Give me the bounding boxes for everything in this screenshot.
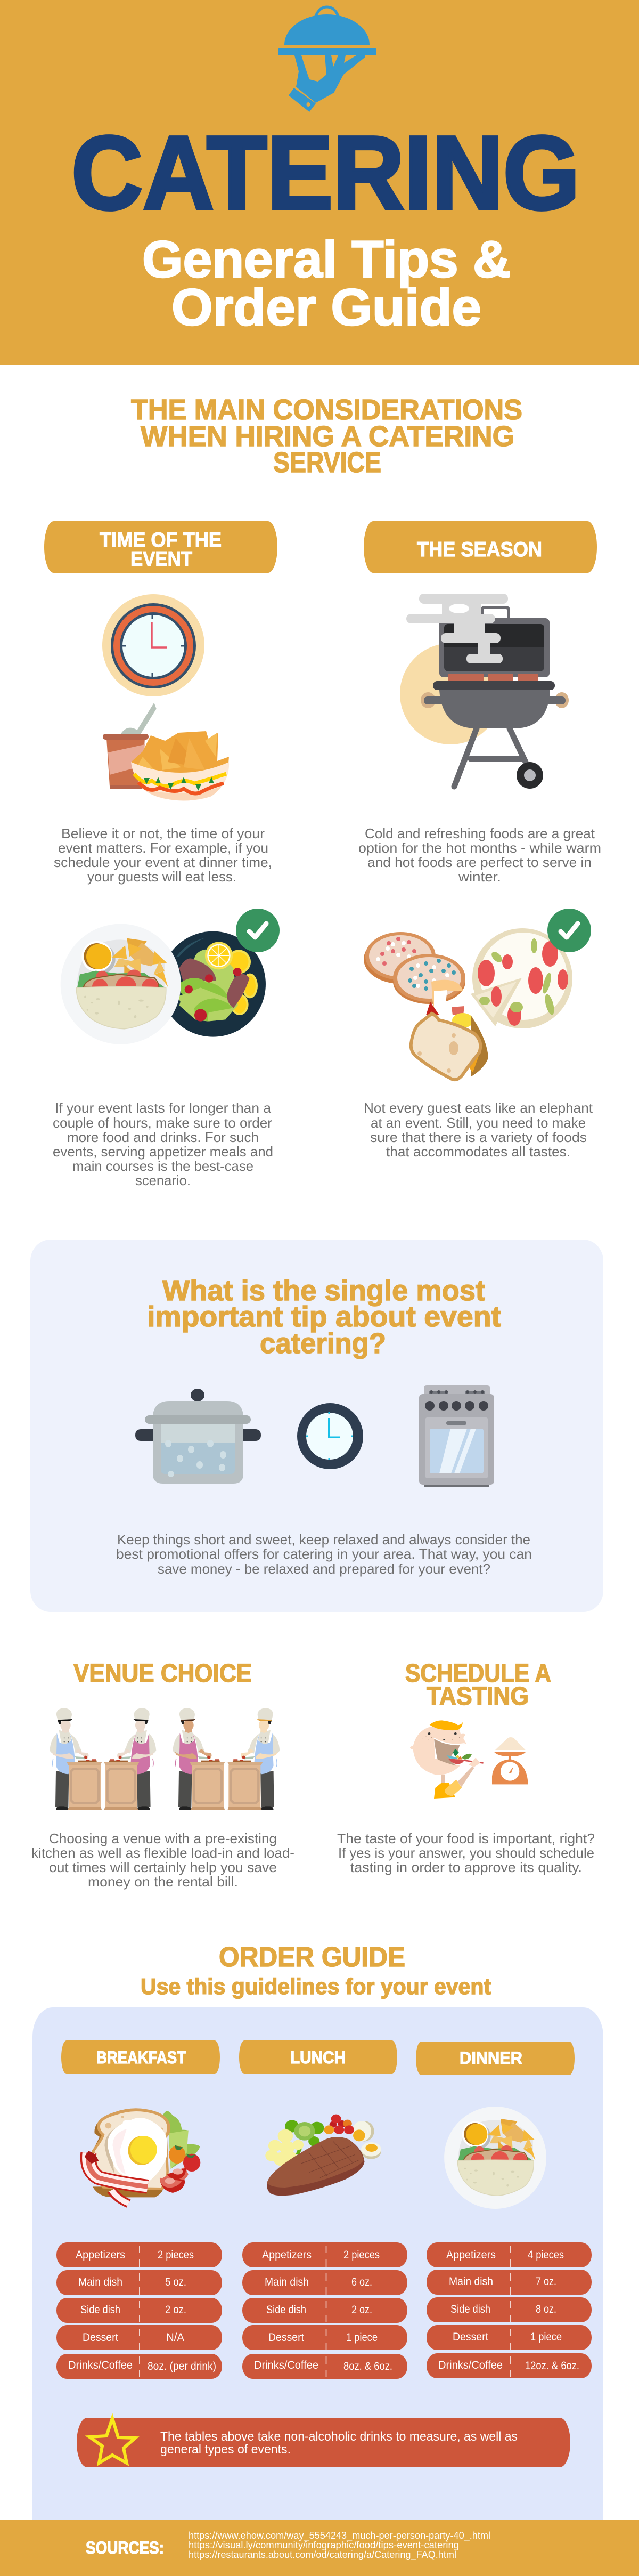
heading: main considerations: WHEN HIRING A CATERING: [141, 420, 514, 452]
heading: schedule a tasting: SCHEDULE A: [405, 1659, 551, 1688]
pill: time of the event: TIME OF THE: [100, 529, 222, 552]
source links: https://restaurants.about.com/od/catering/a/Catering_FAQ.html: [189, 2549, 456, 2561]
pill: the season: [364, 521, 597, 573]
text: the season: [358, 825, 601, 885]
pill: breakfast: [61, 2040, 220, 2074]
text: event length: more food and drinks. For such: [67, 1129, 259, 1145]
table: dinner: [427, 2242, 592, 2378]
table: lunch: [242, 2242, 407, 2379]
heading: venue choice: VENUE CHOICE: [73, 1659, 252, 1688]
row: breakfast drinks: [56, 2354, 222, 2379]
row: breakfast side dish: [56, 2298, 222, 2323]
heading: main considerations: SERVICE: [273, 447, 381, 479]
row: dinner side dish: Side dish: [450, 2303, 490, 2315]
row: dinner side dish: 8 oz.: [536, 2303, 556, 2315]
subtitle: Order Guide: [171, 278, 481, 336]
heading: main considerations: [131, 394, 522, 479]
text: variety of foods: at an event. Still, you need to make: [371, 1115, 586, 1131]
text: variety of foods: Not every guest eats like an elephant: [364, 1100, 593, 1116]
text: venue choice: out times will certainly help you save: [49, 1859, 277, 1875]
row: lunch dessert: Dessert: [268, 2331, 304, 2344]
text: the season: winter.: [458, 869, 501, 885]
text: tip body: best promotional offers for catering in your area. That way, you can: [116, 1546, 532, 1562]
icon: pizza and sandwich: [364, 928, 572, 1080]
text: event length: couple of hours, make sure to order: [53, 1115, 272, 1131]
text: schedule a tasting: If yes is your answer, you should schedule: [338, 1845, 594, 1861]
text: time of the event: schedule your event at dinner time,: [54, 854, 272, 870]
row: dinner dessert: 1 piece: [530, 2331, 562, 2343]
row: dinner dessert: Dessert: [453, 2331, 488, 2343]
pill: lunch: LUNCH: [290, 2048, 346, 2067]
icon: check badge right: [547, 909, 591, 952]
icon: salad and wrap plates: [61, 924, 266, 1044]
icon: star: [89, 2418, 135, 2463]
text: tip body: Keep things short and sweet, keep relaxed and always consider the: [117, 1532, 530, 1548]
footer: sources: [0, 2520, 639, 2576]
label: sources: SOURCES:: [86, 2538, 164, 2557]
pill: time of the event: [44, 521, 277, 573]
row: lunch dessert: 1 piece: [346, 2331, 378, 2344]
row: breakfast main dish: 5 oz.: [165, 2276, 186, 2288]
heading: tip question: catering?: [260, 1327, 386, 1359]
text: event length: main courses is the best-case: [72, 1158, 253, 1174]
header band: [0, 0, 639, 365]
row: lunch side dish: 2 oz.: [351, 2304, 372, 2316]
text: time of the event: your guests will eat less.: [87, 869, 236, 885]
text: tip body: [116, 1532, 532, 1577]
icon: waiter hand with cloche: [278, 7, 376, 112]
row: lunch side dish: [242, 2298, 407, 2323]
panel: order guide: [32, 2007, 603, 2520]
pill: dinner: [416, 2042, 575, 2075]
row: breakfast drinks: Drinks/Coffee: [68, 2359, 133, 2371]
icon: grill with smoke: [400, 594, 569, 789]
row: breakfast main dish: [56, 2270, 222, 2295]
row: lunch main dish: 6 oz.: [351, 2276, 372, 2288]
row: breakfast main dish: Main dish: [78, 2276, 122, 2288]
row: breakfast side dish: 2 oz.: [165, 2304, 186, 2316]
row: lunch appetizers: Appetizers: [262, 2249, 312, 2261]
row: dinner drinks: 12oz. & 6oz.: [525, 2360, 579, 2372]
heading: order guide: ORDER GUIDE: [219, 1942, 405, 1973]
text: variety of foods: that accommodates all tastes.: [386, 1144, 570, 1160]
icon: lunch steak with vegetables: [265, 2115, 381, 2196]
row: dinner main dish: 7 oz.: [536, 2275, 556, 2288]
icon: clock: [297, 1403, 363, 1469]
text: venue choice: Choosing a venue with a pre-existing: [49, 1830, 277, 1846]
row: lunch appetizers: [242, 2242, 407, 2267]
text: variety of foods: sure that there is a variety of foods: [370, 1129, 587, 1145]
heading: tip question: important tip about event: [147, 1301, 501, 1333]
row: breakfast drinks: 8oz. (per drink): [148, 2360, 216, 2372]
row: breakfast appetizers: Appetizers: [76, 2249, 125, 2261]
text: venue choice: [31, 1830, 294, 1890]
text: venue choice: kitchen as well as flexible load-in and load-: [31, 1845, 294, 1861]
row: breakfast dessert: [56, 2325, 222, 2350]
icon: cooking pot: [135, 1389, 261, 1484]
source links: https://www.ehow.com/way_5554243_much-per-person-party-40_.html: [189, 2530, 490, 2541]
text: time of the event: [54, 825, 272, 885]
text: the season: option for the hot months - while warm: [358, 840, 601, 856]
pill: breakfast: BREAKFAST: [96, 2048, 186, 2067]
text: schedule a tasting: The taste of your food is important, right?: [337, 1830, 595, 1846]
row: dinner dessert: [427, 2325, 592, 2350]
text: event length: If your event lasts for longer than a: [55, 1100, 272, 1116]
row: lunch appetizers: 2 pieces: [343, 2249, 380, 2261]
text: note: The tables above take non-alcoholic drinks to measure, as well as: [160, 2429, 518, 2444]
icon: check badge left: [236, 909, 280, 952]
callout: drinks note: [77, 2418, 570, 2467]
icon: dinner wrap plate: [444, 2107, 546, 2209]
row: lunch drinks: [242, 2354, 407, 2379]
row: dinner appetizers: [427, 2242, 592, 2267]
heading: tip question: [147, 1275, 501, 1359]
pill: lunch: [239, 2040, 397, 2074]
text: note: general types of events.: [160, 2442, 291, 2457]
row: dinner appetizers: 4 pieces: [528, 2249, 564, 2261]
illustration: taster with scale: [410, 1720, 528, 1799]
text: variety of foods: [364, 1100, 593, 1160]
source links: https://visual.ly/community/infographic/food/tips-event-catering: [189, 2540, 459, 2550]
pill: time of the event: EVENT: [130, 548, 192, 571]
icon: breakfast toast with egg and bacon: [85, 2108, 200, 2204]
icon: wall clock: [102, 594, 204, 696]
subtitle: General Tips &: [142, 230, 511, 288]
table: breakfast: [56, 2242, 222, 2379]
row: lunch dessert: [242, 2325, 407, 2350]
row: lunch drinks: Drinks/Coffee: [254, 2359, 318, 2371]
text: time of the event: Believe it or not, the time of your: [61, 825, 265, 841]
panel: most important tip: [30, 1240, 603, 1612]
subtitle: [142, 230, 511, 336]
row: lunch main dish: [242, 2270, 407, 2295]
row: breakfast appetizers: 2 pieces: [158, 2249, 194, 2261]
row: dinner drinks: [427, 2353, 592, 2378]
text: note: [160, 2429, 518, 2457]
subheading: guidelines: Use this guidelines for your event: [141, 1974, 491, 1999]
row: lunch drinks: 8oz. & 6oz.: [343, 2360, 392, 2372]
text: event length: [53, 1100, 273, 1188]
heading: schedule a tasting: TASTING: [427, 1682, 529, 1711]
source links: [189, 2530, 490, 2561]
pill: dinner: DINNER: [460, 2048, 522, 2068]
row: breakfast dessert: Dessert: [83, 2331, 118, 2344]
icon: oven: [419, 1385, 494, 1487]
row: dinner appetizers: Appetizers: [446, 2249, 496, 2261]
text: schedule a tasting: tasting in order to approve its quality.: [350, 1859, 582, 1875]
row: breakfast side dish: Side dish: [80, 2304, 120, 2316]
text: event length: scenario.: [135, 1172, 191, 1188]
title: catering: CATERING: [71, 115, 580, 231]
text: schedule a tasting: [337, 1830, 595, 1875]
text: tip body: save money - be relaxed and prepared for your event?: [158, 1561, 490, 1577]
illustration: chefs at counters: [50, 1708, 280, 1810]
text: the season: and hot foods are perfect to serve in: [367, 854, 592, 870]
row: dinner main dish: Main dish: [449, 2275, 493, 2288]
pill: the season: THE SEASON: [417, 538, 542, 561]
text: event length: events, serving appetizer meals and: [53, 1144, 273, 1160]
icon: drink and nachos: [103, 704, 229, 800]
text: the season: Cold and refreshing foods are a great: [365, 825, 595, 841]
heading: tip question: What is the single most: [162, 1275, 485, 1307]
heading: schedule a tasting: [405, 1659, 551, 1711]
row: dinner drinks: Drinks/Coffee: [438, 2359, 503, 2371]
row: dinner side dish: [427, 2297, 592, 2322]
row: breakfast dessert: N/A: [166, 2331, 184, 2344]
row: lunch main dish: Main dish: [265, 2276, 309, 2288]
row: breakfast appetizers: [56, 2242, 222, 2267]
text: venue choice: money on the rental bill.: [88, 1874, 238, 1890]
heading: main considerations: THE MAIN CONSIDERATIONS: [131, 394, 522, 426]
row: dinner main dish: [427, 2270, 592, 2295]
text: time of the event: event matters. For example, if you: [58, 840, 268, 856]
row: lunch side dish: Side dish: [266, 2304, 306, 2316]
